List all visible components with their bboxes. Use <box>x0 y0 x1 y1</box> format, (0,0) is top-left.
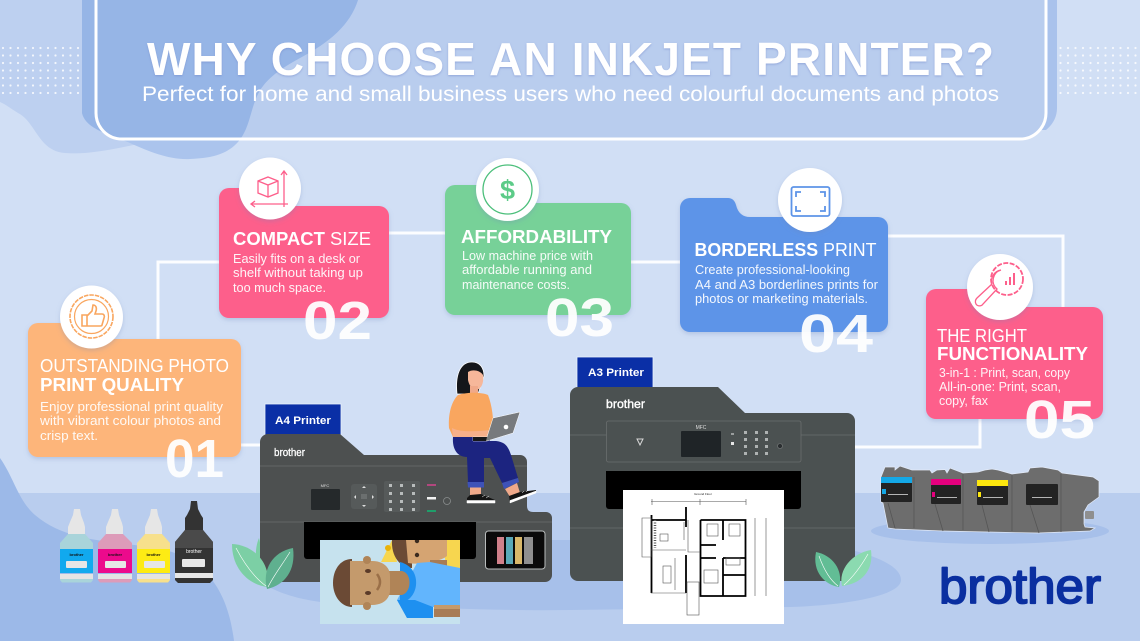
leaves left of A4 printer <box>232 544 293 589</box>
number 05: 05 <box>1024 390 1095 450</box>
body text: crisp text. <box>40 429 98 443</box>
boy <box>333 556 460 618</box>
body text: too much space. <box>233 281 326 295</box>
forearm <box>452 428 492 438</box>
woman with laptop <box>449 362 536 503</box>
bottle: black <box>175 501 213 583</box>
body text: Easily fits on a desk or <box>233 252 360 266</box>
printed photo <box>320 539 460 624</box>
A3 printer <box>570 357 855 581</box>
icon: wrench with gear <box>967 254 1033 320</box>
label: A4 Printer: A4 Printer <box>275 415 332 427</box>
icon: thumbs up badge <box>60 286 123 348</box>
body text: shelf without taking up <box>233 266 363 280</box>
heading: THE RIGHT <box>937 326 1027 346</box>
shadow under cartridges <box>871 518 1109 544</box>
panel: card 2 compact size <box>219 158 389 351</box>
number 03: 03 <box>545 288 614 348</box>
dot pattern right <box>1059 44 1140 94</box>
body text: maintenance costs. <box>462 278 570 292</box>
title panel fill <box>96 0 1046 139</box>
icon: box with dimensions <box>239 158 301 220</box>
subtitle: Perfect for home and small business users who need colourful documents and photos <box>142 83 999 106</box>
bottle: yellow <box>137 509 170 582</box>
dot pattern left <box>0 44 101 94</box>
body text: All-in-one: Print, scan, <box>939 380 1061 394</box>
panel: card 3 affordability <box>445 158 631 348</box>
title: WHY CHOOSE AN INKJET PRINTER? <box>147 33 994 85</box>
number 01: 01 <box>165 429 224 489</box>
panel: card 1 photo print quality <box>28 286 241 489</box>
control panel: MFC <box>321 483 329 488</box>
bottle: black: brother <box>186 549 202 555</box>
right panel shadow <box>1040 0 1057 130</box>
girl <box>381 539 460 568</box>
feet <box>470 483 520 497</box>
heading bold: PRINT QUALITY <box>40 375 184 395</box>
brand text: brother <box>606 397 645 411</box>
connector lines <box>158 233 1063 447</box>
panel blob <box>82 0 358 159</box>
ink bottles <box>60 501 213 583</box>
heading: BORDERLESS PRINT <box>694 240 876 260</box>
body text: Create professional-looking <box>695 263 850 277</box>
icon: dollar coin <box>476 158 539 221</box>
face <box>468 370 483 390</box>
control panel <box>606 421 801 462</box>
body text <box>695 263 878 306</box>
number 02: 02 <box>303 291 372 351</box>
heading: AFFORDABILITY <box>461 227 612 247</box>
neck <box>470 386 478 395</box>
control panel <box>311 481 450 512</box>
paper slot <box>606 471 801 509</box>
leaves right of A3 printer <box>815 550 871 587</box>
title panel border <box>96 0 1046 139</box>
printer body <box>570 387 855 581</box>
bottle: magenta: brother <box>108 552 122 557</box>
heading bold: FUNCTIONALITY <box>937 344 1088 364</box>
body text: 3-in-1 : Print, scan, copy <box>939 366 1071 380</box>
ink tank window <box>486 531 545 569</box>
laptop keyboard <box>473 437 487 441</box>
control panel: MFC <box>696 425 707 431</box>
icon: dollar coin: $ <box>500 175 515 205</box>
label: A4 Printer <box>265 404 341 435</box>
leg left <box>453 437 490 482</box>
soles and laces <box>467 490 536 503</box>
cartridge: black <box>1026 484 1058 505</box>
panel: card 5 the right functionality <box>926 254 1103 450</box>
icon: borderless frame <box>778 168 842 232</box>
bottle: cyan <box>60 509 93 582</box>
body text: Low machine price with <box>462 249 593 263</box>
body text: A4 and A3 borderlines prints for <box>695 278 878 292</box>
leg right <box>478 441 518 483</box>
body text <box>462 249 593 292</box>
laptop <box>473 412 520 441</box>
stem leaf behind A4 printer <box>256 538 268 584</box>
background blob: bottom left <box>0 458 234 641</box>
heading: OUTSTANDING PHOTO <box>40 356 229 376</box>
printed floor plan: Ground Floor <box>694 492 712 496</box>
paper slot <box>304 522 476 559</box>
A4 printer <box>260 404 552 582</box>
number 04: 04 <box>799 304 873 364</box>
hair <box>457 362 484 394</box>
cuffs <box>468 478 519 489</box>
cartridge: yellow <box>977 480 1008 505</box>
torso <box>449 393 493 437</box>
cartridge: cyan <box>881 477 912 502</box>
body text: Enjoy professional print quality <box>40 400 224 414</box>
body text: affordable running and <box>462 263 592 277</box>
panel: card 4 borderless print <box>680 168 888 364</box>
shoes <box>467 490 536 503</box>
body text <box>39 400 224 443</box>
printer body <box>260 434 552 582</box>
shadow under printers <box>250 540 901 610</box>
bottle: magenta <box>98 509 132 582</box>
body text: with vibrant colour photos and <box>39 414 221 428</box>
brand text: brother <box>274 447 305 459</box>
label: A3 Printer <box>577 357 653 388</box>
body text <box>939 366 1071 408</box>
brother logo: brother <box>939 560 1101 614</box>
body text: photos or marketing materials. <box>695 292 868 306</box>
body text <box>233 252 363 295</box>
bottle: cyan: brother <box>70 552 84 557</box>
background blob: top left <box>0 0 200 153</box>
ink cartridges <box>881 466 1099 533</box>
label: A3 Printer: A3 Printer <box>588 367 645 379</box>
heading: COMPACT SIZE <box>233 229 371 249</box>
cartridge: magenta <box>931 479 961 504</box>
bottle: yellow: brother <box>146 552 161 557</box>
printed floor plan <box>623 490 784 624</box>
body text: copy, fax <box>939 394 989 408</box>
laptop logo <box>504 425 508 429</box>
